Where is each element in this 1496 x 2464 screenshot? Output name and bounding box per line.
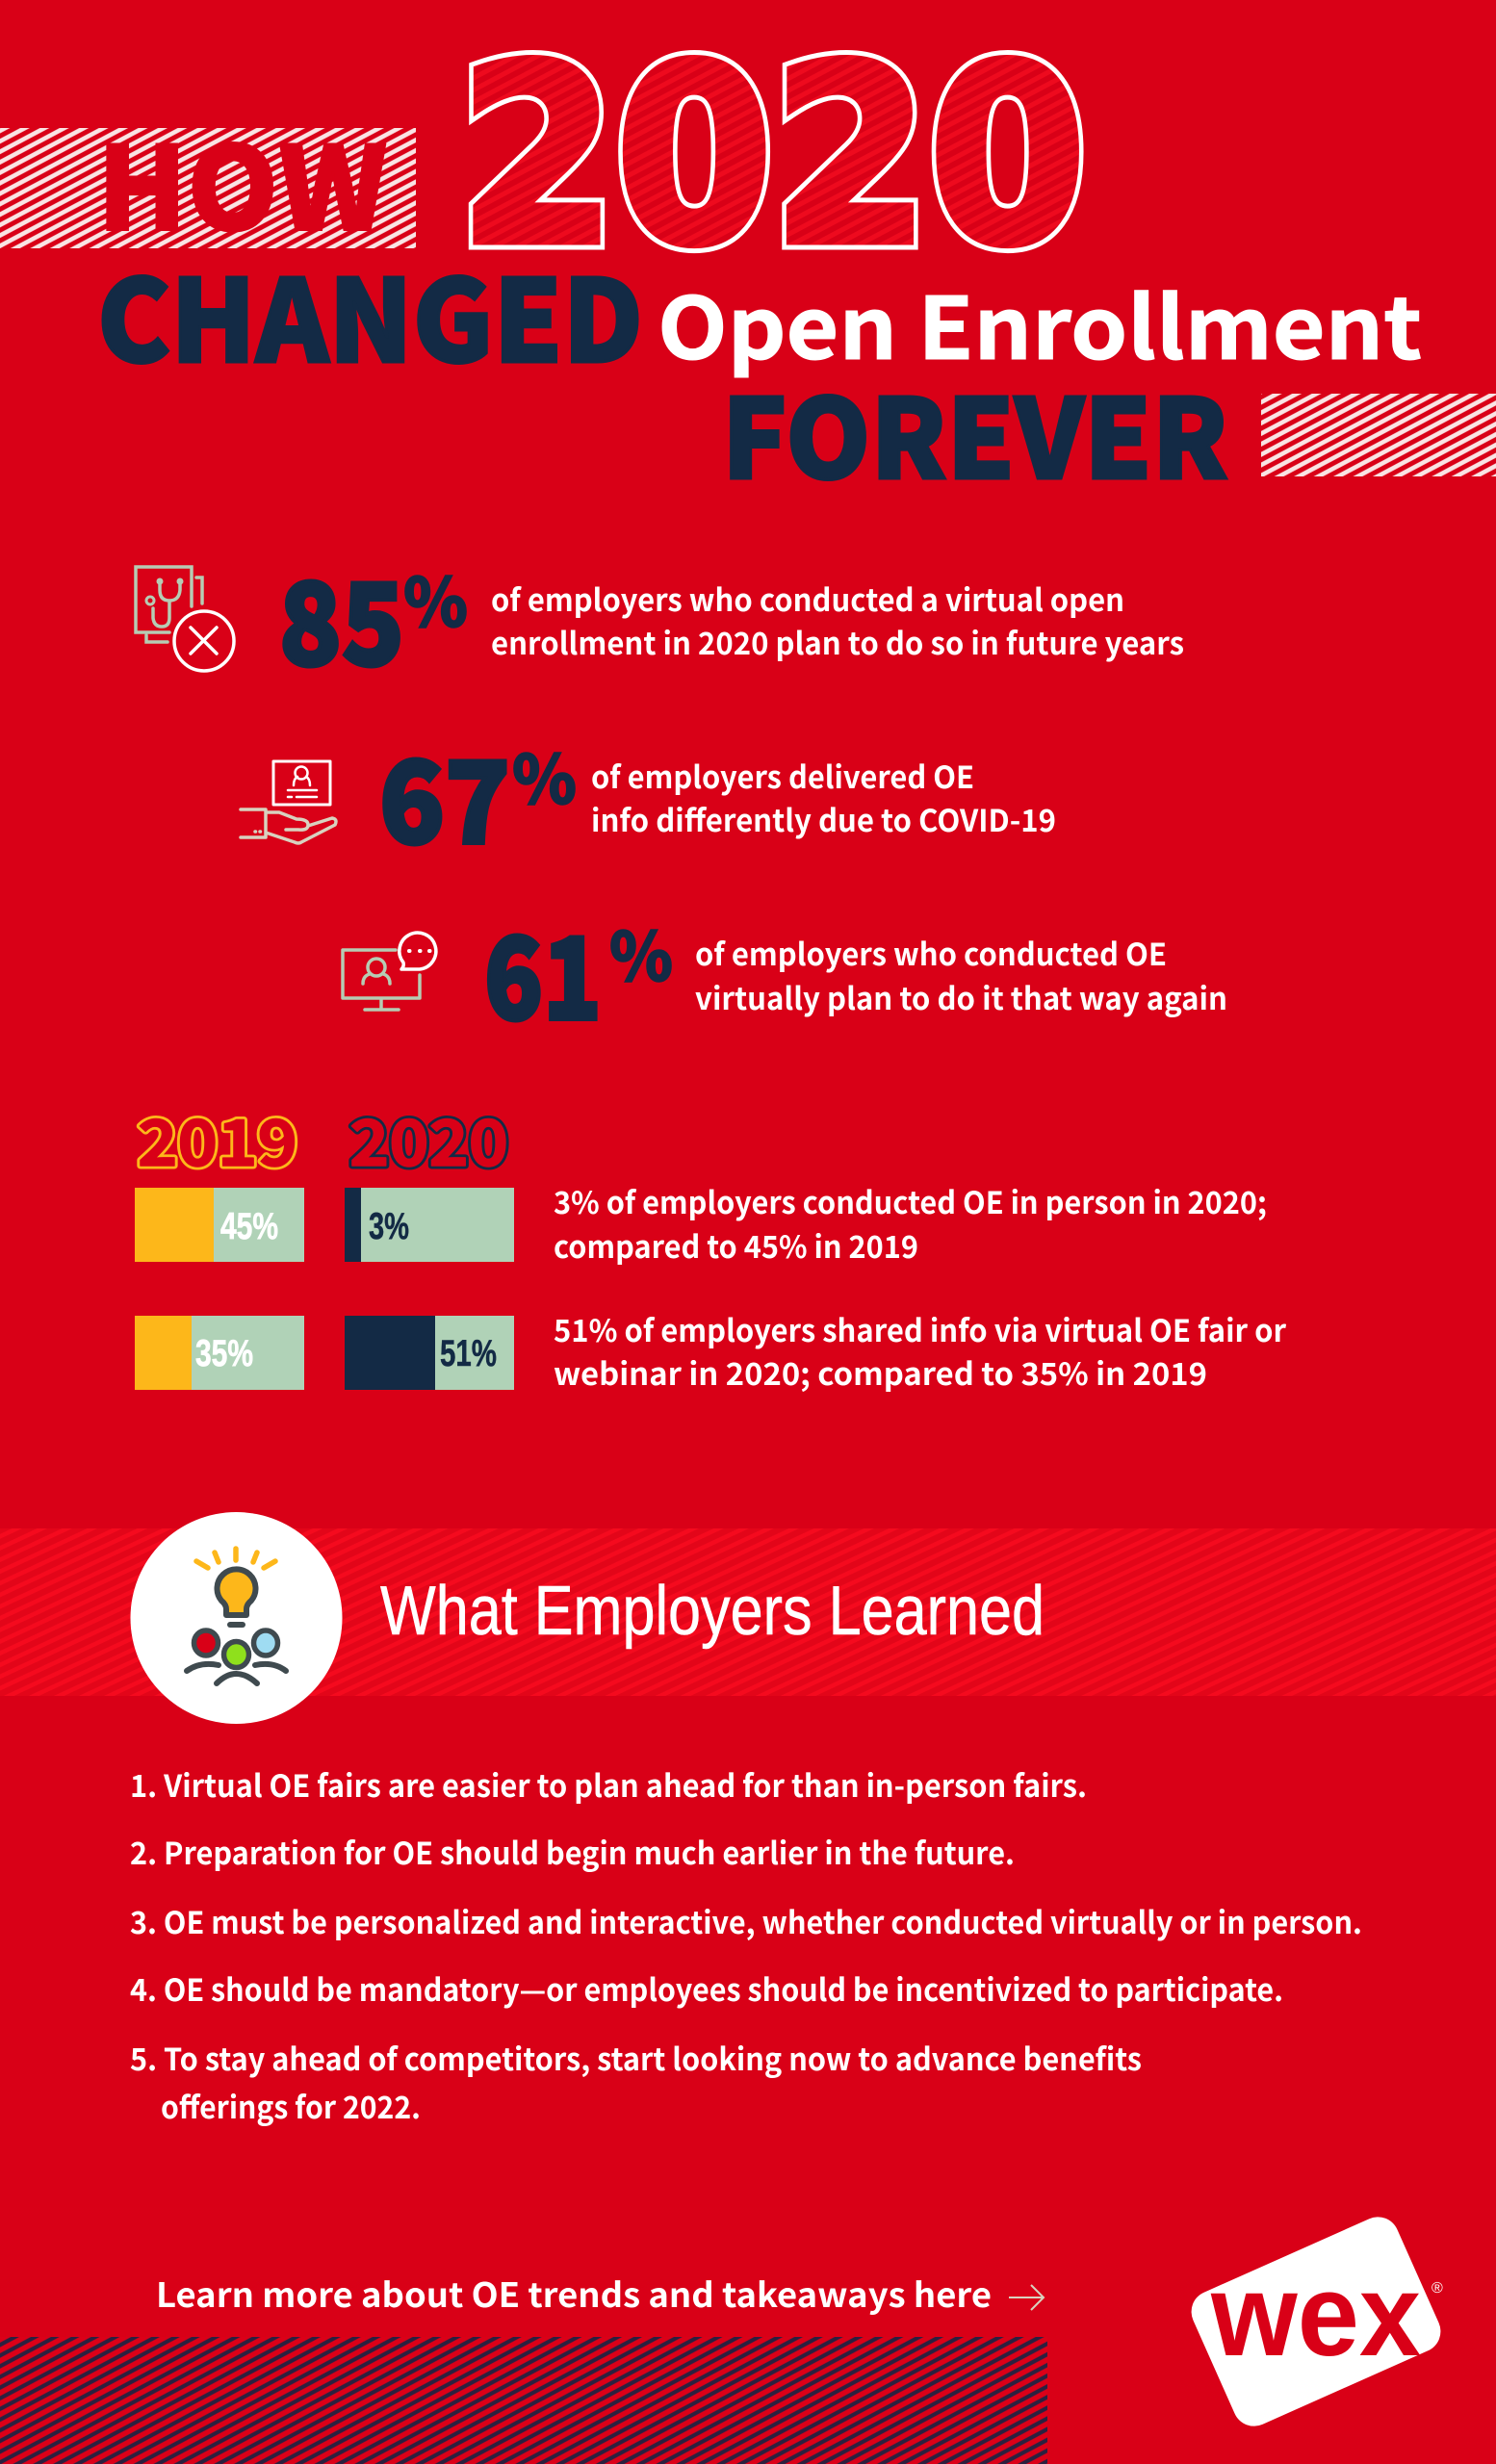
stat text: of employers who conducted a virtual open	[491, 577, 1124, 621]
comparison text: in person: compared to 45% in 2019	[554, 1223, 918, 1268]
icon: hand holding profile card	[241, 761, 336, 843]
striped panel: forever	[1261, 394, 1496, 476]
stat text	[591, 754, 1056, 841]
call to action: Learn more about OE trends and takeaways here	[156, 2269, 992, 2318]
arrow	[1009, 2285, 1044, 2310]
stat text: of employers who conducted OE	[695, 931, 1167, 975]
bar: 2020 virtual 51%: 51%	[440, 1333, 497, 1374]
stat: 85 percent	[136, 533, 1184, 698]
title word: FOREVER: FOREVER	[722, 351, 1228, 510]
number: 61: 61	[484, 887, 602, 1052]
heading: 2019: 2019	[138, 1092, 297, 1185]
comparison text: in person: 3% of employers conducted OE in person in 2020;	[554, 1179, 1267, 1223]
icon: monitor with chat bubble	[343, 933, 436, 1010]
title number: 2020 outline: 2020	[459, 13, 1086, 298]
section band: what employers learned	[0, 1528, 1496, 1696]
icon: stethoscope document with x	[136, 567, 234, 671]
stat: 61 percent	[343, 887, 1227, 1052]
number: 67: 67	[379, 711, 510, 876]
comparison chart: 2019 vs 2020	[135, 1092, 1286, 1395]
heading: 2019: 2019	[138, 1092, 297, 1185]
bar: 2019 virtual 35%	[135, 1316, 304, 1390]
bar: 2019 virtual 35%: 35%	[195, 1333, 253, 1374]
percent sign: %	[609, 904, 673, 1001]
number: 85: 85	[279, 533, 404, 698]
numbered list of lessons: 2. Preparation for OE should begin much earlier in the future.	[130, 1830, 1015, 1874]
stat text: of employers delivered OE	[591, 754, 974, 798]
stat text	[695, 931, 1227, 1019]
bar: 2019 in person 45%: 45%	[220, 1206, 278, 1247]
stat text: enrollment in 2020 plan to do so in future years	[491, 620, 1184, 664]
stat text	[491, 577, 1184, 664]
comparison text: virtual	[554, 1307, 1286, 1395]
heading: 2020: 2020	[349, 1092, 508, 1185]
title block	[0, 13, 1496, 510]
comparison text: virtual: 51% of employers shared info via virtual OE fair or	[554, 1307, 1286, 1351]
bar: 2020 virtual 51%	[345, 1316, 514, 1390]
numbered list of lessons: 4. OE should be mandatory—or employees should be incentivized to participate.	[130, 1966, 1283, 2011]
title words: Open Enrollment: Open Enrollment	[658, 260, 1422, 384]
logo: wex: wex	[1210, 2249, 1421, 2380]
stat text: info differently due to COVID-19	[591, 797, 1056, 841]
numbered list of lessons: offerings for 2022.	[161, 2084, 421, 2128]
heading: 2020: 2020	[349, 1092, 508, 1185]
bar: 2020 in person 3%	[345, 1188, 514, 1262]
percent sign: %	[403, 550, 468, 647]
icon: lightbulb and people in white circle	[131, 1512, 343, 1724]
numbered list of lessons: 5. To stay ahead of competitors, start looking now to advance benefits	[130, 2036, 1142, 2080]
logo: wex	[1185, 2210, 1447, 2433]
striped panel: how	[0, 128, 416, 248]
title number: 2020 outline: 2020	[459, 13, 1086, 298]
logo: wex: ®	[1432, 2280, 1443, 2297]
percent sign: %	[512, 727, 577, 824]
title word: HOW: HOW	[97, 96, 387, 264]
bar: 2019 in person 45%	[135, 1188, 304, 1262]
bar: 2020 in person 3%: 3%	[369, 1206, 409, 1247]
comparison text: virtual: webinar in 2020; compared to 35% in 2019	[554, 1350, 1207, 1395]
numbered list of lessons: 1. Virtual OE fairs are easier to plan ahead for than in-person fairs.	[130, 1762, 1087, 1807]
comparison text: in person	[554, 1179, 1267, 1268]
numbered list of lessons	[130, 1762, 1362, 2128]
numbered list of lessons: 3. OE must be personalized and interactive, whether conducted virtually or in person.	[130, 1899, 1362, 1943]
section heading: What Employers Learned	[380, 1573, 1045, 1650]
stat text: virtually plan to do it that way again	[695, 975, 1227, 1019]
striped panel: footer	[0, 2337, 1047, 2464]
stat: 67 percent	[241, 711, 1056, 876]
title word: CHANGED: CHANGED	[97, 230, 643, 395]
